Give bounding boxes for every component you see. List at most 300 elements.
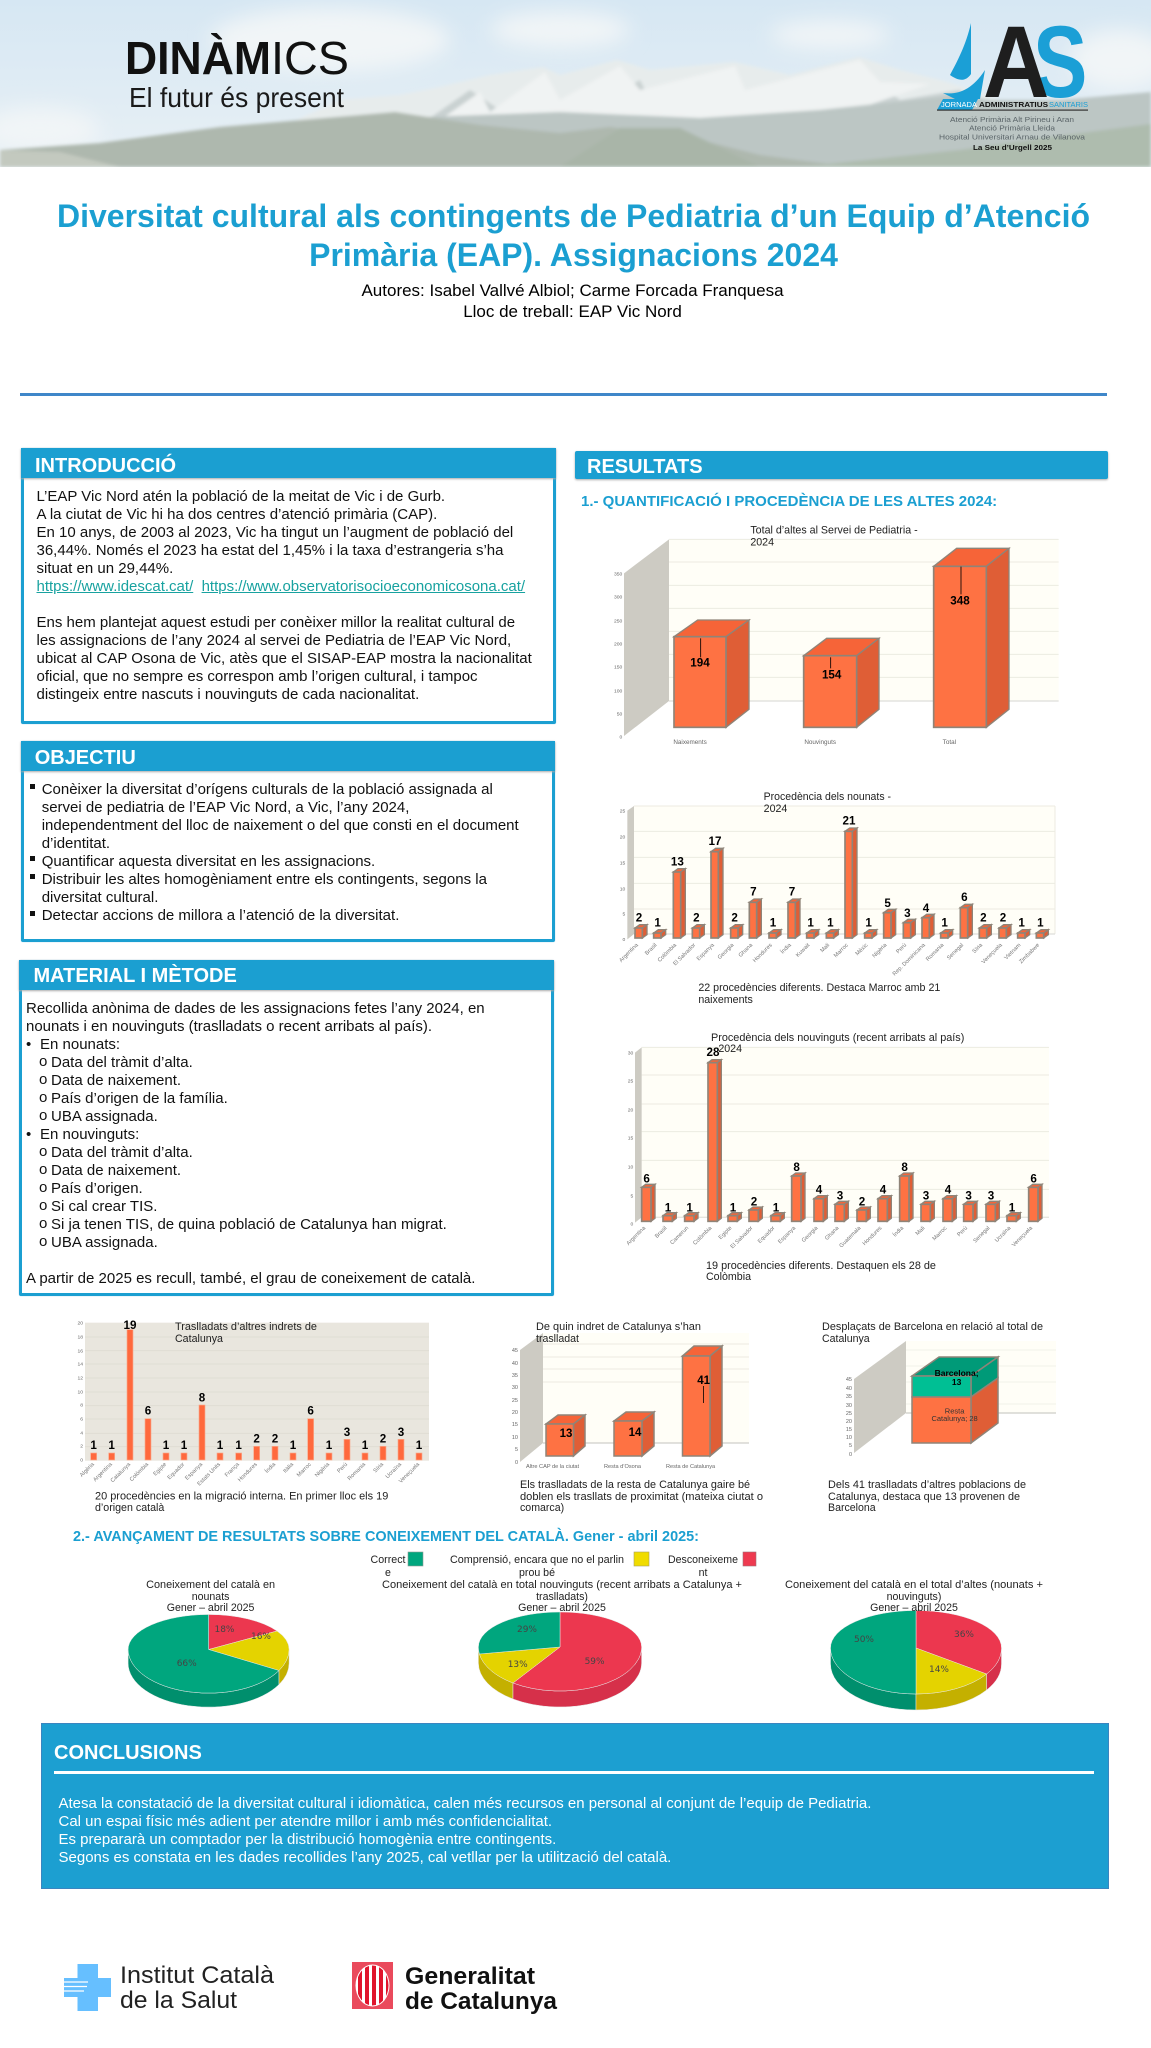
bars: nounats per country: 1 xyxy=(941,916,948,929)
note: de quin indret: doblen els trasllats de proximitat (mateixa ciutat o xyxy=(520,1491,763,1503)
bars: nounats per country: Perú xyxy=(895,943,908,955)
bars: nouvinguts per country: Hondures xyxy=(862,1225,884,1247)
chart: procedència dels nouvinguts xyxy=(626,1032,1049,1283)
authors and workplace: Lloc de treball: EAP Vic Nord xyxy=(463,302,682,321)
chart: traslladats d'altres indrets xyxy=(77,1319,429,1514)
bars: traslladats per origin: Nigèria xyxy=(314,1461,332,1479)
pie: coneixement en total d'altes xyxy=(830,1610,1002,1710)
bar: total 348: Total xyxy=(943,739,956,746)
bars: nounats per country: 5 xyxy=(884,897,891,910)
bar: naixements 194 xyxy=(673,620,749,746)
bars: nounats per country: 1 xyxy=(770,916,777,929)
chart title: traslladats: Catalunya xyxy=(175,1333,223,1345)
text: introducció: distingeix entre nascuts i nouvinguts de cada nacionalitat. xyxy=(36,686,419,703)
chart: total d'altes 2024: 200 xyxy=(614,641,623,647)
bars: nouvinguts per country: Equador xyxy=(757,1225,776,1245)
logo: JAS: Hospital Universitari Arnau de Vilanova xyxy=(939,132,1086,142)
panel: resultats header: RESULTATS xyxy=(587,456,703,478)
chart title: desplaçats: Desplaçats de Barcelona en relació al total de xyxy=(822,1321,1043,1333)
chart: de quin indret de Catalunya: Altre CAP de la ciutat xyxy=(526,1464,580,1470)
text: material i mètode intro: nounats i en nouvinguts (traslladats o recent arribats al país). xyxy=(26,1018,432,1034)
bars: nounats per country: Senegal xyxy=(946,943,965,961)
logo: Generalitat de Catalunya: Generalitat xyxy=(405,1963,535,1990)
bars: nounats per country: 1 xyxy=(807,916,814,929)
bars: traslladats per origin: Egipte xyxy=(152,1462,168,1477)
note: de quin indret: Els traslladats de la resta de Catalunya gaire bé xyxy=(520,1479,750,1491)
bars: nouvinguts per country: 4 xyxy=(945,1184,952,1197)
text: introducció: 36,44%. Només el 2023 ha estat del 1,45% i la taxa d’estrangeria s’ha xyxy=(36,542,503,559)
pie: coneixement en nouvinguts xyxy=(478,1612,642,1707)
pie titles xyxy=(146,1579,1043,1614)
text: material i mètode intro: UBA assignada. xyxy=(51,1234,158,1250)
bars: nouvinguts per country: Georgia xyxy=(801,1225,820,1244)
bars: traslladats per origin: Argentina xyxy=(92,1461,114,1483)
chart: procedència dels nouvinguts: 0 xyxy=(631,1221,634,1227)
note: nouvinguts: 19 procedències diferents. Destaquen els 28 de xyxy=(706,1260,936,1272)
text: material i mètode intro: o xyxy=(39,1070,47,1088)
chart: de quin indret de Catalunya: 10 xyxy=(512,1435,518,1441)
chart: de quin indret de Catalunya: 14 xyxy=(629,1427,642,1439)
bars: nounats per country: Espanya xyxy=(696,942,716,962)
chart: total d'altes 2024: 0 xyxy=(620,734,623,740)
bars: nounats per country: Síria xyxy=(972,942,985,955)
bars: nouvinguts per country: 3 xyxy=(988,1189,995,1202)
heading: introducció: INTRODUCCIÓ xyxy=(35,455,176,477)
bars: nounats per country: El Salvador xyxy=(672,942,697,967)
text: objectiu: servei de pediatria de l’EAP Vic Nord, a Vic, l’any 2024, xyxy=(42,799,409,816)
bars: traslladats per origin: Estats Units xyxy=(196,1462,222,1487)
legend: pies: Correct xyxy=(370,1554,406,1566)
bars: nouvinguts per country: 2 xyxy=(751,1195,758,1208)
chart: de quin indret de Catalunya: 0 xyxy=(515,1460,518,1466)
chart: desplaçats de Barcelona: Catalunya; 28 xyxy=(931,1414,978,1423)
chart: de quin indret de Catalunya: 15 xyxy=(512,1422,518,1428)
bars: nouvinguts per country: 28 xyxy=(707,1046,720,1059)
bars: traslladats per origin: Hondures xyxy=(237,1462,259,1483)
bars: traslladats per origin: 1 xyxy=(235,1439,242,1452)
authors and workplace: Autores: Isabel Vallvé Albiol; Carme Forcada Franquesa xyxy=(361,281,784,300)
bars: nouvinguts per country: 2 xyxy=(859,1195,866,1208)
bar: naixements 194: 194 xyxy=(690,657,710,670)
pie: coneixement en nouvinguts: 59% xyxy=(585,1657,605,1667)
panel: conclusions xyxy=(41,1723,1109,1889)
bars: nouvinguts per country: Ucraïna xyxy=(994,1225,1013,1244)
bars: nounats per country: Veneçuela xyxy=(981,942,1004,965)
chart title: total d'altes: Total d’altes al Servei de Pediatria - xyxy=(750,525,918,537)
panel: introducció xyxy=(21,448,556,724)
pie titles: Gener – abril 2025 xyxy=(870,1602,958,1614)
bars: traslladats per origin: Algèria xyxy=(79,1461,96,1479)
chart: de quin indret de Catalunya: Resta de Catalunya xyxy=(666,1464,716,1470)
logo: DINÀMICS: DINÀM xyxy=(125,32,271,84)
text: material i mètode intro: o xyxy=(39,1196,47,1214)
chart title: nouvinguts: 2024 xyxy=(718,1043,742,1055)
bars: nouvinguts per country: Camerun xyxy=(669,1226,690,1246)
chart: desplaçats de Barcelona: Resta xyxy=(945,1406,965,1416)
logo: DINÀMICS: El futur és present xyxy=(129,82,344,113)
bars: nouvinguts per country: 6 xyxy=(1030,1172,1037,1185)
chart: procedència dels nounats xyxy=(618,791,1055,1006)
bars: traslladats per origin: Veneçuela xyxy=(398,1461,422,1485)
title: Primària (EAP). Assignacions 2024 xyxy=(309,237,838,273)
bars: nounats per country: Argentina xyxy=(618,942,640,964)
bars: nounats per country: Rep. Dominicana xyxy=(892,942,927,977)
bar: nouvinguts 154: 154 xyxy=(822,669,842,682)
bars: traslladats per origin: Itàlia xyxy=(282,1461,296,1475)
text: material i mètode intro: o xyxy=(39,1214,47,1232)
note: traslladats: d’origen català xyxy=(95,1502,164,1514)
bars: nouvinguts per country: Egipte xyxy=(718,1226,733,1241)
subheading: avançament: 2.- AVANÇAMENT DE RESULTATS SOBRE CONEIXEMENT DEL CATALÀ. Gener - abril 2025: xyxy=(73,1528,699,1545)
chart: total d'altes 2024: 300 xyxy=(614,594,623,600)
bars: traslladats per origin: 1 xyxy=(290,1439,297,1452)
text: material i mètode intro: o xyxy=(39,1052,47,1070)
logo: JAS: Atenció Primària Alt Pirineu i Aran xyxy=(950,115,1074,124)
bars: traslladats per origin: França xyxy=(224,1461,241,1479)
text: objectiu: Conèixer la diversitat d’orígens culturals de la població assignada al xyxy=(42,781,493,798)
logo: Institut Català de la Salut: Institut Català xyxy=(120,1962,275,1989)
panel: objectiu xyxy=(21,741,555,942)
pie titles: traslladats) xyxy=(536,1591,588,1603)
pie: coneixement en total d'altes: 14% xyxy=(929,1665,949,1675)
bars: nounats per country: Kuwait xyxy=(795,942,812,959)
chart: procedència dels nouvinguts: 10 xyxy=(628,1164,634,1170)
chart: desplaçats de Barcelona: 15 xyxy=(846,1427,852,1433)
logo: JAS: La Seu d’Urgell 2025 xyxy=(973,143,1052,152)
text: material i mètode intro: País d’origen de la família. xyxy=(51,1090,228,1106)
chart: desplaçats de Barcelona: 35 xyxy=(846,1394,852,1400)
bars: nounats per country: Marroc xyxy=(833,942,850,959)
heading: material i mètode xyxy=(19,960,554,990)
title: Diversitat cultural als contingents de Pediatria d’un Equip d’Atenció xyxy=(57,198,1090,234)
chart: traslladats d'altres indrets: 14 xyxy=(77,1362,83,1368)
pie: coneixement en total d'altes: 50% xyxy=(854,1635,874,1645)
text: material i mètode intro xyxy=(26,1000,485,1286)
bars: traslladats per origin: 2 xyxy=(253,1433,260,1446)
chart: procedència dels nounats: 15 xyxy=(620,860,626,866)
chart: desplaçats de Barcelona: 10 xyxy=(846,1435,852,1441)
bars: nounats per country: 2 xyxy=(693,911,700,924)
bars: nounats per country: 2 xyxy=(731,911,738,924)
bars: traslladats per origin: 19 xyxy=(124,1319,137,1332)
text: material i mètode intro: o xyxy=(39,1232,47,1250)
text: introducció: A la ciutat de Vic hi ha dos centres d’atenció primària (CAP). xyxy=(36,506,437,523)
bars: traslladats per origin: Perú xyxy=(336,1462,349,1475)
bars: traslladats per origin: 1 xyxy=(181,1439,188,1452)
text: material i mètode intro: Data de naixement. xyxy=(51,1072,181,1088)
panel: material i mètode xyxy=(19,960,554,1296)
bars: nouvinguts per country: 4 xyxy=(816,1184,823,1197)
chart: desplaçats de Barcelona: 45 xyxy=(846,1377,852,1383)
text: material i mètode intro: • xyxy=(26,1126,31,1142)
bars: nounats per country: 17 xyxy=(709,835,721,848)
text: introducció: Ens hem plantejat aquest estudi per conèixer millor la realitat cultural de xyxy=(36,614,515,631)
subheading: quantificació: 1.- QUANTIFICACIÓ I PROCEDÈNCIA DE LES ALTES 2024: xyxy=(581,493,997,510)
bars: traslladats per origin: Ucraïna xyxy=(385,1461,404,1480)
text: objectiu: Quantificar aquesta diversitat en les assignacions. xyxy=(42,853,375,870)
bars: traslladats per origin: 1 xyxy=(326,1439,333,1452)
chart: de quin indret de Catalunya: 40 xyxy=(512,1361,518,1367)
chart: traslladats d'altres indrets: 16 xyxy=(77,1348,83,1354)
chart: de quin indret de Catalunya: Resta d’Osona xyxy=(604,1464,642,1470)
bars: nouvinguts per country: 4 xyxy=(880,1184,887,1197)
chart title: desplaçats: Catalunya xyxy=(822,1333,870,1345)
bars: nounats per country: Nigèria xyxy=(871,942,889,959)
note: desplaçats: Catalunya, destaca que 13 provenen de xyxy=(828,1491,1020,1503)
pie titles: Coneixement del català en el total d’altes (nounats + xyxy=(785,1579,1043,1591)
chart: procedència dels nouvinguts: 5 xyxy=(631,1193,634,1199)
bars: nouvinguts per country: Guatemala xyxy=(839,1225,863,1249)
chart: de quin indret de Catalunya: 13 xyxy=(560,1428,572,1440)
chart title: nouvinguts: Procedència dels nouvinguts (recent arribats al país) xyxy=(711,1032,964,1044)
bars: nounats per country: Georgia xyxy=(717,942,736,961)
pie: coneixement en total d'altes: 36% xyxy=(954,1630,974,1640)
text: objectiu: Distribuir les altes homogèniament entre els contingents, segons la xyxy=(42,871,487,888)
chart title: nounats: Procedència dels nounats - xyxy=(764,791,891,803)
text: material i mètode intro: UBA assignada. xyxy=(51,1108,158,1124)
text: objectiu: diversitat cultural. xyxy=(42,889,158,906)
bars: traslladats per origin xyxy=(79,1319,423,1487)
note: nouvinguts: Colòmbia xyxy=(706,1271,751,1283)
chart: de quin indret de Catalunya: 45 xyxy=(512,1348,518,1354)
bars: traslladats per origin: 3 xyxy=(344,1426,351,1439)
pie: coneixement en nounats: 16% xyxy=(251,1632,271,1642)
bars: traslladats per origin: 1 xyxy=(90,1439,97,1452)
chart: procedència dels nounats: 25 xyxy=(620,808,626,814)
note: traslladats: 20 procedències en la migració interna. En primer lloc els 19 xyxy=(95,1491,388,1503)
heading: conclusions: CONCLUSIONS xyxy=(54,1742,202,1764)
chart: traslladats d'altres indrets: 6 xyxy=(80,1417,83,1423)
logo: JAS: JORNADA xyxy=(941,100,977,109)
chart title: de quin indret: De quin indret de Catalunya s’han xyxy=(536,1321,701,1333)
bars: nouvinguts per country: 6 xyxy=(643,1172,650,1185)
bars: nouvinguts per country: Índia xyxy=(891,1224,906,1238)
chart: desplaçats de Barcelona: 30 xyxy=(846,1403,852,1409)
bars: traslladats per origin: 6 xyxy=(145,1405,152,1418)
bars: nouvinguts per country: Marroc xyxy=(932,1225,949,1242)
text: material i mètode intro: o xyxy=(39,1106,47,1124)
bars: traslladats per origin: 2 xyxy=(272,1433,279,1446)
text: material i mètode intro: Data del tràmit d’alta. xyxy=(51,1144,193,1160)
bars: nounats per country: Ghana xyxy=(738,942,755,959)
heading: objectiu: OBJECTIU xyxy=(35,747,136,769)
bars: traslladats per origin: Colòmbia xyxy=(129,1461,151,1483)
text: material i mètode intro: Recollida anònima de dades de les assignacions fetes l’any 2024, en xyxy=(26,1000,485,1016)
bars: nounats per country: 2 xyxy=(980,911,987,924)
logo: Institut Català de la Salut: de la Salut xyxy=(120,1987,237,2014)
pie titles: nouvinguts) xyxy=(887,1591,941,1603)
bars: traslladats per origin: 1 xyxy=(362,1439,369,1452)
legend: pies: nt xyxy=(699,1567,707,1579)
text: introducció: oficial, que no sempre es correspon amb l’origen cultural, i tampoc xyxy=(36,668,478,685)
chart: traslladats d'altres indrets: 18 xyxy=(77,1335,83,1341)
text: objectiu: independentment del lloc de naixement o del que consti en el document xyxy=(42,817,519,834)
bars: nounats per country: 1 xyxy=(827,916,834,929)
chart: desplaçats de Barcelona: 5 xyxy=(849,1443,852,1449)
bars: traslladats per origin: Espanya xyxy=(184,1461,205,1482)
chart: procedència dels nounats: 5 xyxy=(623,911,626,917)
bars: nounats per country: 7 xyxy=(750,886,757,899)
chart: desplaçats de Barcelona xyxy=(822,1321,1056,1514)
bars: nouvinguts per country: Senegal xyxy=(972,1226,991,1244)
chart: desplaçats de Barcelona: 20 xyxy=(846,1419,852,1425)
chart: desplaçats de Barcelona: 0 xyxy=(849,1452,852,1458)
text: objectiu: Detectar accions de millora a l’atenció de la diversitat. xyxy=(42,907,399,924)
bars: traslladats per origin: 3 xyxy=(398,1426,405,1439)
chart title: nounats: 2024 xyxy=(764,803,787,815)
chart: de quin indret de Catalunya: 35 xyxy=(512,1373,518,1379)
chart title: traslladats: Traslladats d’altres indrets de xyxy=(175,1321,317,1333)
note: desplaçats: Dels 41 traslladats d’altres poblacions de xyxy=(828,1479,1026,1491)
note: de quin indret: comarca) xyxy=(520,1502,564,1514)
text: introducció xyxy=(36,488,532,703)
bars: traslladats per origin: Equador xyxy=(167,1462,186,1481)
bar: nouvinguts 154 xyxy=(804,638,879,746)
bullets: objectiu xyxy=(30,784,35,916)
text: introducció: L’EAP Vic Nord atén la població de la meitat de Vic i de Gurb. xyxy=(36,488,445,505)
text: introducció: https://www.idescat.cat/ https://www.observatorisocioeconomicosona.cat/ xyxy=(36,578,525,595)
bars: nouvinguts per country: Argentina xyxy=(626,1225,648,1247)
text: material i mètode intro: o xyxy=(39,1142,47,1160)
pie titles: nounats xyxy=(192,1591,229,1603)
bars: nouvinguts per country: 1 xyxy=(1009,1201,1016,1214)
bar: nouvinguts 154: Nouvinguts xyxy=(804,739,836,746)
bars: nouvinguts per country: Espanya xyxy=(777,1225,798,1245)
bars: nounats per country: 1 xyxy=(1037,916,1044,929)
bars: nounats per country: Colòmbia xyxy=(657,942,679,964)
chart: total d'altes 2024: 250 xyxy=(614,618,623,624)
bars: traslladats per origin: Marroc xyxy=(296,1462,313,1479)
bars: nounats per country: Vietnam xyxy=(1004,942,1023,961)
bars: nouvinguts per country: 1 xyxy=(665,1201,672,1214)
bars: nouvinguts per country: Perú xyxy=(956,1226,969,1238)
bars: nouvinguts per country: El Salvador xyxy=(730,1225,754,1250)
bars: nouvinguts per country: 3 xyxy=(923,1189,930,1202)
logo: JAS xyxy=(937,4,1088,152)
text: material i mètode intro: Data de naixement. xyxy=(51,1162,181,1178)
logo: Institut Català de la Salut xyxy=(64,1962,275,2014)
chart: procedència dels nounats: 10 xyxy=(620,886,626,892)
bars: nounats per country: 6 xyxy=(961,891,968,904)
bars: nouvinguts per country: 1 xyxy=(730,1201,737,1214)
text: material i mètode intro: País d’origen. xyxy=(51,1180,143,1196)
bars: nounats per country: 2 xyxy=(636,911,643,924)
chart: procedència dels nouvinguts: 15 xyxy=(628,1135,634,1141)
bars: nounats per country: 2 xyxy=(1000,911,1007,924)
chart: total d'altes 2024: 100 xyxy=(614,688,623,694)
chart: traslladats d'altres indrets: 12 xyxy=(77,1376,83,1382)
legend: pies xyxy=(370,1552,756,1579)
pie: coneixement en nounats: 18% xyxy=(214,1625,235,1635)
bars: nounats per country: 7 xyxy=(789,886,795,899)
bars: nounats per country: 13 xyxy=(671,855,684,868)
text: material i mètode intro: Si ja tenen TIS, de quina població de Catalunya han migrat. xyxy=(51,1216,447,1232)
bars: traslladats per origin: Índia xyxy=(263,1461,278,1475)
text: conclusions: Segons es constata en les dades recollides l’any 2025, cal vetllar per la utilització del català. xyxy=(58,1849,671,1866)
bars: nouvinguts per country: 1 xyxy=(773,1201,780,1214)
chart: de quin indret de Catalunya xyxy=(512,1321,763,1514)
text: material i mètode intro: • xyxy=(26,1036,31,1052)
banner: mountain photo with logos xyxy=(0,0,1151,167)
text: material i mètode intro: o xyxy=(39,1160,47,1178)
chart: traslladats d'altres indrets: 4 xyxy=(80,1430,83,1436)
text: introducció: les assignacions de l’any 2024 al servei de Pediatria de l’EAP Vic Nord, xyxy=(36,632,511,649)
chart: procedència dels nouvinguts: 20 xyxy=(628,1107,634,1113)
chart: total d'altes 2024: 50 xyxy=(617,711,623,717)
text: material i mètode intro: o xyxy=(39,1178,47,1196)
logo: JAS: S xyxy=(1033,4,1087,119)
note: nounats: 22 procedències diferents. Destaca Marroc amb 21 xyxy=(698,982,940,994)
chart: desplaçats de Barcelona: 40 xyxy=(846,1386,852,1392)
bars: nounats per country: 1 xyxy=(865,916,872,929)
bars: nounats per country: 1 xyxy=(654,916,661,929)
text: conclusions: Atesa la constatació de la diversitat cultural i idiomàtica, calen més recursos en personal al conjunt de l’equip de Pediatria. xyxy=(58,1795,871,1812)
logo: JAS: ADMINISTRATIUS xyxy=(979,100,1048,109)
title xyxy=(57,198,1090,273)
chart title: total d'altes: 2024 xyxy=(750,537,774,549)
logo: Generalitat de Catalunya: de Catalunya xyxy=(405,1988,558,2015)
bars: nounats per country: 1 xyxy=(1018,916,1025,929)
chart: total d'altes 2024: 150 xyxy=(614,664,623,670)
bars: traslladats per origin: 1 xyxy=(108,1439,115,1452)
text: material i mètode intro: A partir de 2025 es recull, també, el grau de coneixement de català. xyxy=(26,1270,475,1286)
bars: nouvinguts per country: 3 xyxy=(965,1189,972,1202)
heading: material i mètode: MATERIAL I MÈTODE xyxy=(34,964,237,986)
bars: nounats per country: Hondures xyxy=(752,942,774,964)
bars: nounats per country: Zimbabwe xyxy=(1018,943,1041,965)
legend: pies: prou bé xyxy=(519,1567,555,1579)
bars: nouvinguts per country: 3 xyxy=(837,1189,844,1202)
panel: resultats header xyxy=(575,451,1108,479)
bars: traslladats per origin: 8 xyxy=(199,1392,206,1405)
bars: nouvinguts per country: 8 xyxy=(793,1161,800,1174)
logo: DINÀMICS xyxy=(125,32,349,113)
text: material i mètode intro: En nouvinguts: xyxy=(40,1126,139,1142)
bars: nouvinguts per country: Ghana xyxy=(824,1225,841,1242)
pie: coneixement en nounats xyxy=(128,1614,289,1707)
pie titles: Gener – abril 2025 xyxy=(167,1602,255,1614)
text: introducció: ubicat al CAP Osona de Vic, atès que el SISAP-EAP mostra la nacionalitat xyxy=(36,650,532,667)
bars: nouvinguts per country: Brasil xyxy=(654,1226,668,1240)
authors and workplace xyxy=(361,281,784,321)
chart: procedència dels nounats: 0 xyxy=(623,937,626,943)
text: objectiu xyxy=(42,781,519,924)
bars: traslladats per origin: 1 xyxy=(217,1439,224,1452)
text: material i mètode intro: Si cal crear TIS. xyxy=(51,1198,157,1214)
logo: JAS: A xyxy=(983,4,1049,119)
bar: total 348 xyxy=(934,548,1009,746)
text: introducció: situat en un 29,44%. xyxy=(36,560,173,577)
text: material i mètode intro: o xyxy=(39,1088,47,1106)
bars: traslladats per origin: 6 xyxy=(307,1405,314,1418)
bars: nouvinguts per country: 1 xyxy=(686,1201,693,1214)
bars: traslladats per origin: Romania xyxy=(347,1461,368,1482)
bars: nounats per country: Mali xyxy=(819,943,831,954)
text: material i mètode intro: Data del tràmit d’alta. xyxy=(51,1054,193,1070)
text: conclusions: Cal un espai físic més adient per atendre millor i amb més confidencialitat. xyxy=(58,1813,552,1830)
pie titles: Coneixement del català en total nouvinguts (recent arribats a Catalunya + xyxy=(382,1579,742,1591)
text: conclusions: Es prepararà un comptador per la distribució homogènia entre contingents. xyxy=(58,1831,556,1848)
bars: nouvinguts per country xyxy=(626,1046,1042,1250)
chart: desplaçats de Barcelona: Barcelona; xyxy=(935,1368,979,1378)
chart: total d'altes 2024 xyxy=(614,525,1059,746)
pie titles: Gener – abril 2025 xyxy=(518,1602,606,1614)
chart: de quin indret de Catalunya: 41 xyxy=(697,1375,711,1387)
logo: DINÀMICS: ICS xyxy=(271,32,349,84)
chart: traslladats d'altres indrets: 20 xyxy=(77,1320,83,1326)
pie: coneixement en nouvinguts: 29% xyxy=(517,1625,537,1635)
pie: coneixement en nounats: 66% xyxy=(177,1659,197,1669)
